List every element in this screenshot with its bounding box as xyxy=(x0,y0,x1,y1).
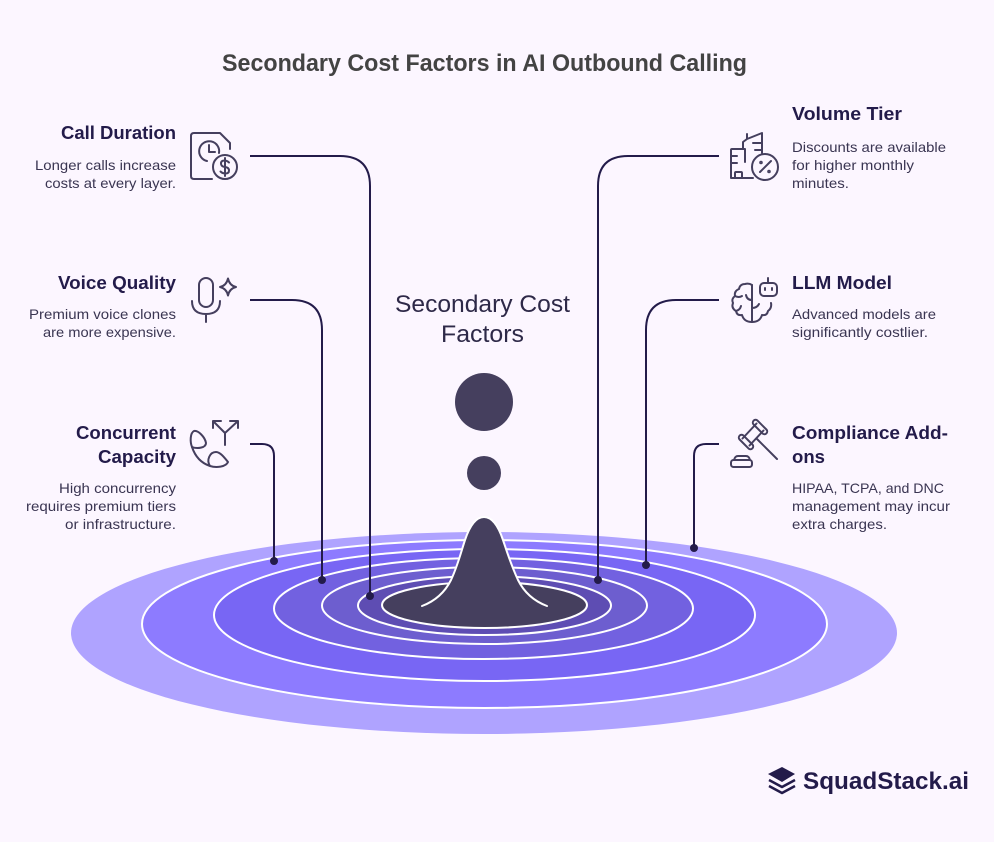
panel: voice quality: Voice Quality xyxy=(58,273,176,293)
connector: voice quality xyxy=(250,300,326,584)
panel: concurrent capacity: Capacity xyxy=(98,447,176,467)
panel: volume tier: Volume Tier xyxy=(792,104,902,124)
panel: volume tier: Discounts are available xyxy=(792,139,946,155)
panel: compliance add-ons: management may incur xyxy=(792,498,950,514)
icon: phone with split arrows xyxy=(191,421,238,467)
panel: compliance add-ons: extra charges. xyxy=(792,516,887,532)
panel: llm model: LLM Model xyxy=(792,273,892,293)
panel: compliance add-ons: Compliance Add- xyxy=(792,423,948,443)
droplet large xyxy=(455,373,513,431)
panel: voice quality: are more expensive. xyxy=(43,324,176,340)
connector: volume tier xyxy=(594,156,719,584)
droplet small xyxy=(467,456,501,490)
panel: voice quality: Premium voice clones xyxy=(29,306,176,322)
connector: compliance add-ons xyxy=(690,444,719,552)
panel: llm model: Advanced models are xyxy=(792,306,936,322)
panel: concurrent capacity: High concurrency xyxy=(59,480,176,496)
panel: concurrent capacity xyxy=(26,423,176,532)
panel: volume tier: for higher monthly xyxy=(792,157,914,173)
connector: call duration xyxy=(250,156,374,600)
central peak xyxy=(422,517,547,606)
icon: buildings with percent xyxy=(731,133,778,180)
panel: compliance add-ons: ons xyxy=(792,447,825,467)
panel: volume tier: minutes. xyxy=(792,175,849,191)
center label xyxy=(395,291,570,348)
panel: compliance add-ons xyxy=(792,423,950,532)
panel: compliance add-ons: HIPAA, TCPA, and DNC xyxy=(792,480,944,496)
concentric ripple rings xyxy=(71,532,897,734)
icon: microphone sparkle xyxy=(192,278,236,322)
panel: llm model xyxy=(792,273,936,340)
logo: squadstack: SquadStack.ai xyxy=(803,768,969,795)
center label: Secondary Cost xyxy=(395,291,570,318)
panel: volume tier xyxy=(792,104,946,191)
panel: call duration: Call Duration xyxy=(61,123,176,143)
panel: call duration: Longer calls increase xyxy=(35,157,176,173)
panel: call duration: costs at every layer. xyxy=(45,175,176,191)
panel: concurrent capacity: Concurrent xyxy=(76,423,176,443)
connector: concurrent capacity xyxy=(250,444,278,565)
panel: call duration xyxy=(35,123,176,191)
panel: voice quality xyxy=(29,273,176,340)
connector: llm model xyxy=(642,300,719,569)
icon: gavel xyxy=(731,419,777,467)
icon: brain with robot xyxy=(732,278,777,322)
title: Secondary Cost Factors in AI Outbound Calling xyxy=(222,50,747,77)
center label: Factors xyxy=(441,321,524,348)
panel: concurrent capacity: or infrastructure. xyxy=(65,516,176,532)
icon: document clock dollar xyxy=(191,133,237,179)
panel: concurrent capacity: requires premium tiers xyxy=(26,498,176,514)
panel: llm model: significantly costlier. xyxy=(792,324,928,340)
